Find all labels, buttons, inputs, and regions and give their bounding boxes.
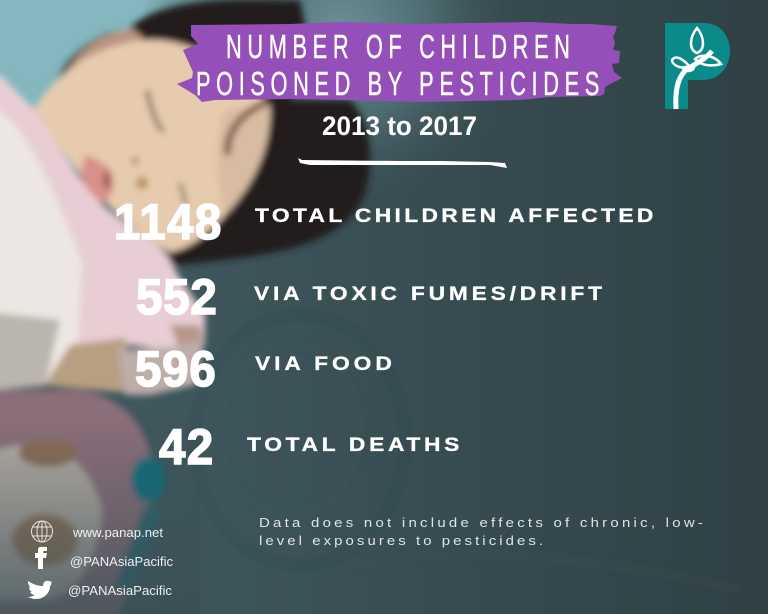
facebook handle: @PANAsiaPacific	[70, 554, 173, 569]
footnote: Data does not include effects of chronic, low-	[259, 515, 703, 530]
icon: twitter	[28, 581, 52, 599]
label: VIA TOXIC FUMES/DRIFT	[254, 284, 602, 305]
label: VIA FOOD	[255, 354, 392, 375]
icon: facebook	[35, 547, 47, 569]
footnote: level exposures to pesticides.	[259, 533, 543, 548]
footnote	[259, 515, 703, 548]
underline stroke	[298, 158, 507, 168]
label: TOTAL DEATHS	[247, 435, 459, 456]
title banner	[177, 22, 622, 102]
pink wristband and hand	[0, 390, 153, 614]
subtitle: date range: 2013 to 2017	[322, 111, 477, 141]
pink blanket	[0, 60, 205, 392]
brush stroke	[177, 22, 622, 102]
number: 1148	[114, 195, 221, 250]
stat: 1148 total children affected	[114, 195, 653, 250]
contact links	[28, 521, 173, 599]
bottom-left darkening	[0, 420, 200, 614]
stat: 552 via toxic fumes/drift	[136, 270, 602, 325]
stat: 596 via food	[135, 342, 392, 397]
title line 2: POISONED BY PESTICIDES	[196, 65, 599, 102]
website: www.panap.net	[72, 525, 163, 540]
icon: globe	[32, 521, 52, 542]
twitter handle: @PANAsiaPacific	[68, 583, 173, 598]
number: 596	[135, 342, 216, 397]
stat: 42 total deaths	[159, 420, 459, 475]
logo: PAN P with plant	[665, 23, 730, 109]
IV tube	[220, 345, 360, 515]
arm	[44, 338, 135, 392]
hair	[130, 0, 370, 266]
number: 42	[159, 420, 213, 475]
eyes, brow, nose, mouth	[147, 90, 163, 132]
face	[33, 40, 270, 252]
number: 552	[136, 270, 217, 325]
label: TOTAL CHILDREN AFFECTED	[255, 206, 653, 227]
title line 1: NUMBER OF CHILDREN	[226, 28, 570, 65]
